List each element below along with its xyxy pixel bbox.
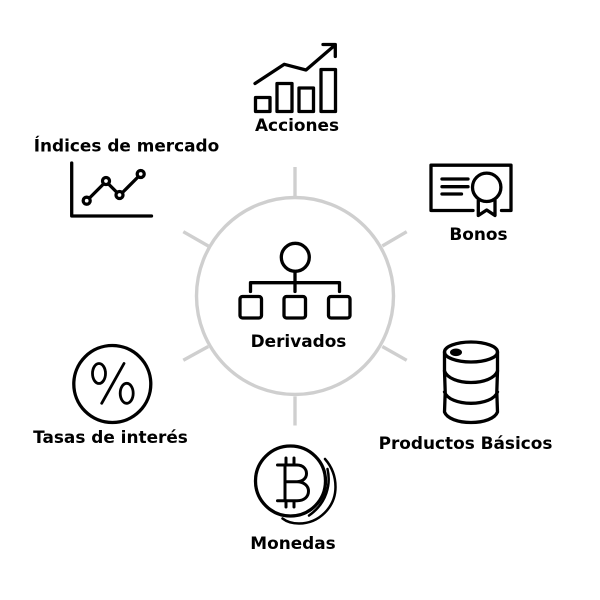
icon: rising bar chart with arrow (255, 44, 336, 112)
item: Tasas de interés (33, 346, 188, 447)
item: Acciones (255, 44, 339, 135)
label: Índices de mercado: Índices de mercado (34, 134, 219, 156)
item: Índices de mercado (34, 134, 219, 216)
icon: percent circle (74, 346, 151, 422)
icon: line chart (72, 163, 152, 216)
item: Monedas (250, 446, 336, 553)
center: Derivados (240, 243, 350, 351)
icon: certificate (431, 165, 511, 216)
label: Productos Básicos: Productos Básicos (379, 433, 552, 453)
label: Derivados: Derivados (251, 331, 346, 351)
item: Productos Básicos (379, 342, 552, 453)
label: Monedas: Monedas (250, 533, 336, 553)
label: Acciones: Acciones (255, 115, 339, 135)
label: Bonos: Bonos (449, 224, 508, 244)
icon: organization hierarchy (240, 243, 350, 318)
icon: oil barrel (444, 342, 498, 422)
label: Tasas de interés: Tasas de interés (33, 427, 188, 447)
central hub circle with spokes (183, 167, 407, 426)
icon: bitcoin coin (256, 446, 336, 524)
item: Bonos (431, 165, 511, 244)
